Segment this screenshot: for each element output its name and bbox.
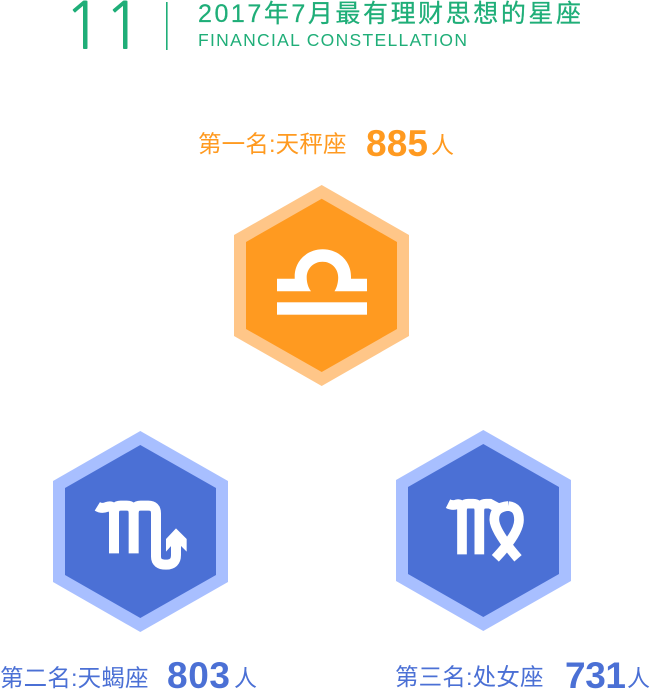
icon: Libra symbol (277, 249, 367, 315)
first place: Libra (198, 123, 454, 386)
hexagon badge (53, 431, 228, 632)
third place: Virgo (395, 430, 650, 690)
hexagon inner (408, 444, 559, 617)
icon: Scorpio symbol (97, 506, 187, 565)
hexagon badge (234, 185, 409, 386)
value: 885: 885 (366, 123, 428, 164)
header divider (166, 2, 168, 50)
icon: Virgo symbol (448, 504, 519, 558)
unit: 人 (431, 132, 454, 158)
title: 2017年7月最有理财思想的星座 (198, 0, 581, 28)
hexagon badge (396, 430, 571, 631)
hexagon inner (65, 445, 216, 618)
subtitle: FINANCIAL CONSTELLATION (198, 30, 467, 50)
label: first place: 第一名:天秤座 (198, 131, 346, 157)
hexagon inner (246, 199, 397, 372)
label: third place: 第三名:处女座 (395, 664, 544, 690)
header (64, 0, 581, 59)
second place: Scorpio (0, 431, 257, 690)
